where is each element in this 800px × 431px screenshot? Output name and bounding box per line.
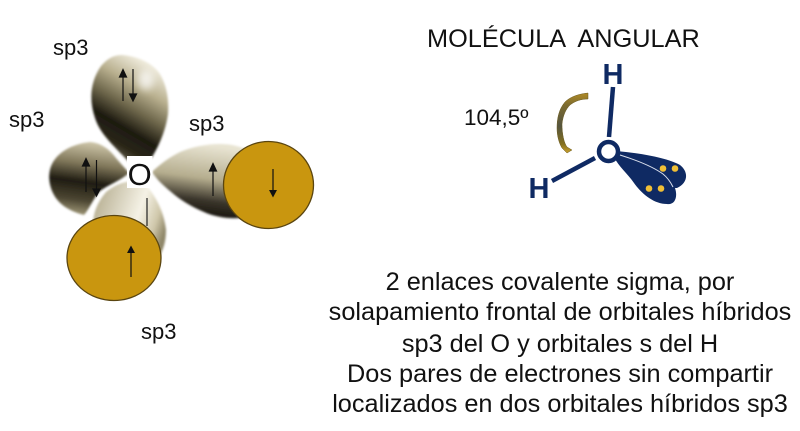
atom: hydrogen left: H xyxy=(529,173,549,205)
electron arrow: right lobe xyxy=(210,164,216,196)
atom: hydrogen top: H xyxy=(603,59,623,91)
hydrogen s orbital: bottom xyxy=(67,216,161,300)
description text: 2 enlaces covalente sigma, por xyxy=(386,268,734,296)
arrow: bond angle xyxy=(557,93,588,153)
water molecule structure xyxy=(529,59,686,205)
hydrogen s orbital: right xyxy=(224,142,314,228)
lobe: top sp3 xyxy=(91,55,168,167)
description text: Dos pares de electrones sin compartir xyxy=(347,360,773,388)
lone pair lobes xyxy=(614,151,686,204)
label: sp3 top: sp3 xyxy=(53,35,88,60)
bond: O-H up xyxy=(609,87,613,137)
title: MOLÉCULA ANGULAR xyxy=(427,24,700,53)
lobe: bottom sp3 xyxy=(93,181,166,262)
bond: O-H left xyxy=(552,158,595,181)
atom: oxygen xyxy=(599,142,618,161)
label: sp3 left: sp3 xyxy=(9,107,44,132)
electron arrows: top lobe xyxy=(120,69,136,101)
orbital diagram: oxygen sp3 hybrid lobes xyxy=(49,55,313,300)
description text: localizados en dos orbitales híbridos sp3 xyxy=(332,390,788,418)
description text: sp3 del O y orbitales s del H xyxy=(402,330,718,358)
description text xyxy=(329,268,791,418)
lobe: left sp3 xyxy=(49,142,129,215)
highlight: top lobe xyxy=(138,70,154,90)
lobe: right sp3 xyxy=(152,144,246,218)
oxygen label: O xyxy=(128,157,152,192)
label: sp3 right: sp3 xyxy=(189,111,224,136)
electron arrows: left lobe xyxy=(82,158,100,196)
lone pair electrons xyxy=(646,165,678,192)
label: sp3 bottom: sp3 xyxy=(141,319,176,344)
angle label: 104,5º xyxy=(464,105,529,130)
electron arrow: bottom lobe stem xyxy=(146,198,148,226)
description text: solapamiento frontal de orbitales híbridos xyxy=(329,298,791,326)
